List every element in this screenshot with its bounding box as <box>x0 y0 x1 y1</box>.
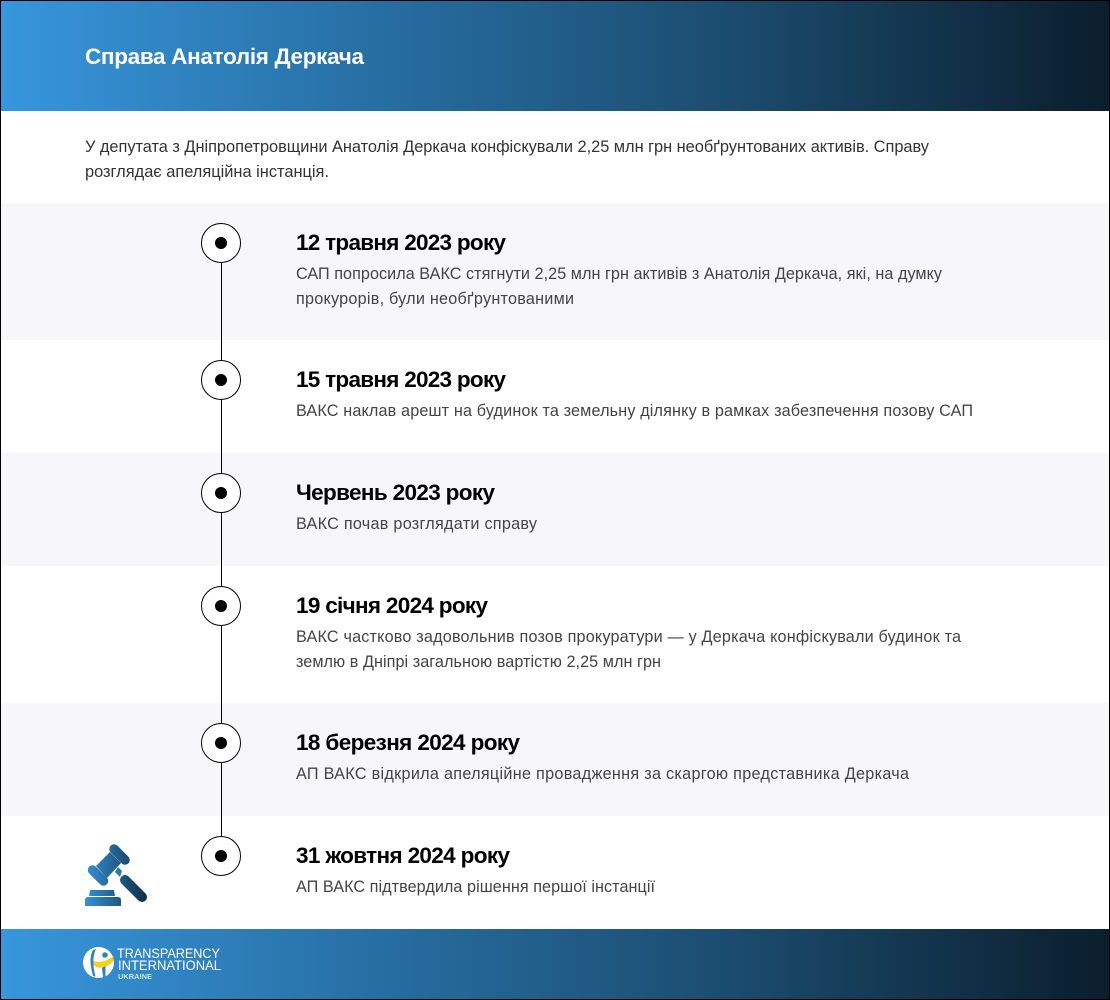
event: 15 травня 2023: ВАКС наклав арешт на будинок та земельну ділянку в рамках забезпечення позову САП <box>296 402 973 420</box>
event: 31 жовтня 2024 <box>296 843 656 896</box>
event: 19 січня 2024: землю в Дніпрі загальною вартістю 2,25 млн грн <box>296 653 661 671</box>
timeline marker: 15 травня 2023 <box>202 360 240 400</box>
event: 19 січня 2024: 19 січня 2024 року <box>296 593 488 618</box>
logo: Transparency International Ukraine: INTERNATIONAL <box>118 958 221 973</box>
timeline line <box>220 243 222 856</box>
footer banner <box>1 929 1109 999</box>
event: 12 травня 2023: прокурорів, були необґрунтованими <box>296 290 574 308</box>
logo: Transparency International Ukraine: UKRAINE <box>118 972 152 981</box>
event: 18 березня 2024: 18 березня 2024 року <box>296 730 520 755</box>
title: Справа Анатолія Деркача <box>85 44 364 69</box>
event: 19 січня 2024: ВАКС частково задовольнив позов прокуратури — у Деркача конфіскували будинок та <box>296 628 961 646</box>
timeline marker: 19 січня 2024 <box>202 586 240 626</box>
intro text: розглядає апеляційна інстанція. <box>85 163 329 181</box>
event: 12 травня 2023: 12 травня 2023 року <box>296 230 506 255</box>
event: 18 березня 2024 <box>296 730 909 783</box>
event: 18 березня 2024: АП ВАКС відкрила апеляційне провадження за скаргою представника Деркача <box>296 765 909 783</box>
event: 15 травня 2023: 15 травня 2023 року <box>296 367 506 392</box>
timeline marker: 18 березня 2024 <box>202 724 240 762</box>
intro text <box>85 138 930 181</box>
timeline marker: 31 жовтня 2024 <box>202 836 240 876</box>
intro text: У депутата з Дніпропетровщини Анатолія Деркача конфіскували 2,25 млн грн необґрунтованих активів. Справу <box>85 138 930 156</box>
logo: Transparency International Ukraine <box>83 946 221 981</box>
row backgrounds <box>1 203 1109 816</box>
event: Червень 2023: ВАКС почав розглядати справу <box>296 515 538 533</box>
event: 31 жовтня 2024: 31 жовтня 2024 року <box>296 843 510 868</box>
header banner <box>1 1 1109 111</box>
logo: Transparency International Ukraine: TRANSPARENCY <box>117 946 220 961</box>
timeline marker: 12 травня 2023 <box>202 224 240 262</box>
event: 19 січня 2024 <box>296 593 961 671</box>
event: 15 травня 2023 <box>296 367 973 420</box>
event: Червень 2023 <box>296 480 538 533</box>
event: 31 жовтня 2024: АП ВАКС підтвердила рішення першої інстанції <box>296 878 656 896</box>
event: 12 травня 2023 <box>296 230 943 308</box>
icon: gavel <box>85 849 142 906</box>
event: Червень 2023: Червень 2023 року <box>296 480 495 505</box>
event: 12 травня 2023: САП попросила ВАКС стягнути 2,25 млн грн активів з Анатолія Деркача, які, на думку <box>296 265 943 283</box>
timeline marker: Червень 2023 <box>202 474 240 512</box>
